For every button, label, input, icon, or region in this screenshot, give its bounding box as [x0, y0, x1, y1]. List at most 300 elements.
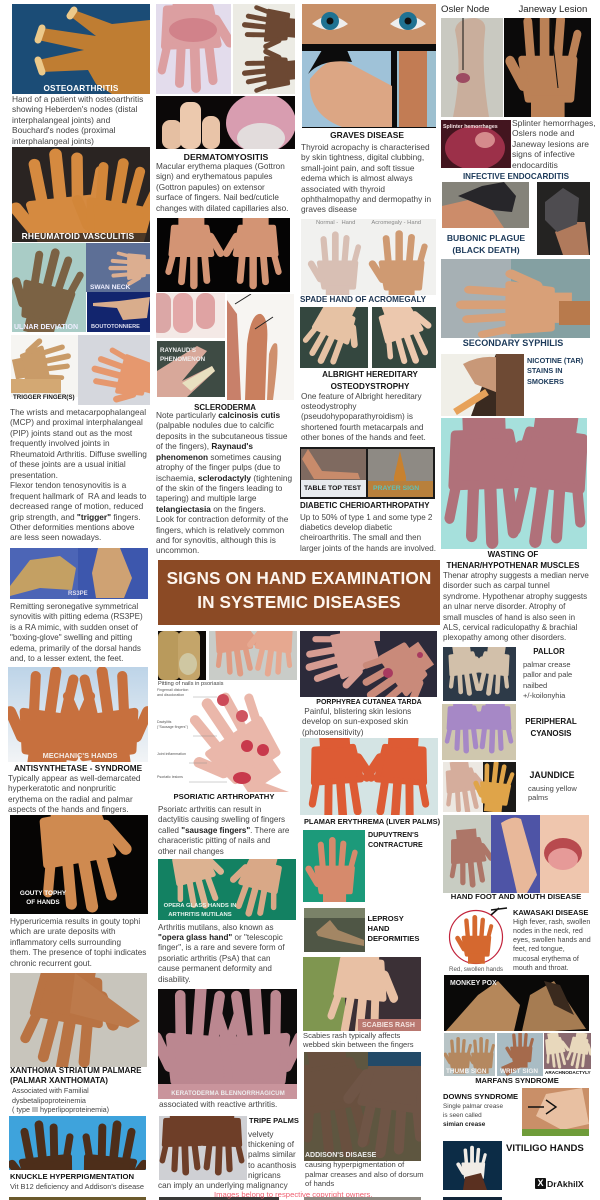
photo: trigger finger left [11, 335, 78, 397]
heading: nicotine stains: SMOKERS [527, 377, 564, 386]
heading: dupuytren's contracture [368, 830, 423, 850]
text: downs description: simian crease [443, 1120, 485, 1128]
text: diabetic description: cheiroarthritis. The small and then [300, 533, 421, 542]
photo: graves hand and shin [302, 44, 436, 128]
photo: addison's disease [304, 1052, 421, 1161]
text: scleroderma description: of the fingers), Raynaud's [156, 441, 253, 451]
photo: bottom strip [9, 1197, 146, 1200]
text: endocarditis description: endocarditis [512, 160, 558, 170]
text: rheumatoid arthritis description: frequent hallmark of RA and leads to [10, 491, 147, 501]
photo: thumb sign [444, 1033, 495, 1076]
photo: arachnodactyly [544, 1033, 591, 1069]
photo: tripe palms [159, 1116, 247, 1180]
text: diabetic description: diabetics develop diabetic [300, 523, 392, 532]
heading: leprosy hand deformities: HAND [368, 924, 389, 933]
text: rheumatoid arthritis description: of these joints are a usual initial [10, 459, 126, 469]
text: reactive arthritis: associated with reactive arthritis. [159, 1100, 277, 1109]
text: rheumatoid arthritis description: (MCP) and proximal interphalangeal [10, 417, 143, 427]
photo: albright right [372, 307, 436, 368]
text: knuckle description: Vit B12 deficiency and Addison's disease [10, 1182, 144, 1191]
text: kawasaki description: High fever, rash, swollen [513, 918, 590, 926]
heading: jaundice: JAUNDICE [530, 770, 574, 780]
text: albright description: One feature of Albright hereditary [301, 392, 422, 400]
photo: bubonic plague fist [537, 182, 590, 255]
heading: bubonic plague: BUBONIC PLAGUE [447, 232, 525, 242]
photo: pallor [443, 647, 516, 701]
text: albright description: osteodystrophy [301, 402, 357, 411]
photo: keratoderma blennorrhagicum [158, 989, 297, 1099]
text: rheumatoid arthritis description: decreased range of motion, reduced [10, 501, 143, 511]
labels: psoriatic hand anatomy: and discoloration [157, 693, 184, 697]
text: gout description: chronic recurrent gout. [10, 959, 92, 968]
heading: dupuytren's contracture: DUPUYTREN'S [368, 831, 419, 839]
photo: nail pitting [158, 631, 206, 680]
heading: wasting of thenar/hypothenar muscles: THENAR/HYPOTHENAR MUSCLES [447, 561, 579, 570]
text: dermatomyositis description: surface of fingers. Nail bed/cuticle [156, 193, 279, 202]
text: dermatomyositis description: (Gottron papules) on extensor [156, 183, 265, 192]
text: wasting description [443, 571, 589, 644]
labels: psoriatic hand anatomy: Fingernail distortion [157, 688, 188, 692]
text: wasting description: plexopathy among other disorders. [443, 633, 566, 642]
heading: albright hereditary osteodystrophy [322, 368, 418, 392]
icon: X logo [535, 1178, 546, 1189]
photo: scleroderma hands [157, 218, 290, 292]
heading: peripheral cyanosis [525, 716, 577, 740]
heading: scleroderma: SCLERODERMA [194, 402, 256, 412]
photo: swan neck [86, 243, 150, 292]
text: scleroderma description: deposits in the subcutaneous tissue [156, 431, 287, 441]
text: antisynthetase description [8, 774, 140, 814]
label: addison's disease: ADDISON'S DISAESE [305, 1152, 376, 1159]
text: addison's description: of hands [305, 1179, 334, 1188]
heading: hand foot and mouth disease: HAND FOOT AND MOUTH DISEASE [451, 892, 581, 901]
heading: palmar erythema: PLAMAR ERYTHREMA (LIVER PALMS) [304, 816, 440, 826]
text: tripe palms description: nigricans [248, 1171, 281, 1180]
text: RS3PE description [10, 602, 143, 663]
labels: psoriatic hand anatomy: Psoriatic lesions [157, 775, 183, 779]
photo: nicotine stains [441, 354, 524, 416]
text: albright description [301, 392, 426, 444]
label: splinter hemorrhages: Splinter hemorrhages [443, 124, 498, 130]
text: rheumatoid arthritis description: presentation. [10, 470, 58, 480]
text: psoriatic arthropathy description [158, 805, 289, 856]
heading: tripe palms: TRIPE PALMS [249, 1116, 299, 1125]
label: prayer sign: PRAYER SIGN [373, 485, 419, 492]
photo: scleroderma fingertips [156, 293, 225, 338]
text: graves description: small-joint pain, and soft tissue [301, 163, 414, 173]
text: arthritis mutilans description: psoriatic arthritis (PsA) that can [158, 954, 270, 963]
text: dermatomyositis description: Macular erythema plaques (Gottron [156, 162, 285, 171]
text: dermatomyositis description: changes with dilated capillaries also. [156, 204, 288, 213]
heading: spade hand of acromegaly: SPADE HAND OF ACROMEGALY [300, 295, 426, 304]
text: diabetic description: Up to 50% of type 1 and some type 2 [300, 512, 432, 522]
text: gout description: inflammatory cells surrounding [10, 938, 121, 947]
text: scleroderma description [156, 410, 292, 555]
labels: psoriatic hand anatomy: ("Sausage fingers") [157, 725, 188, 729]
text: wasting description: an ulnar nerve disorder. Atrophy of [443, 602, 565, 611]
text: graves description: Thyroid acropachy is characterised [301, 142, 430, 152]
icon: kawasaki hand in circle [447, 906, 509, 966]
heading: porphyria cutanea tarda: PORPHYREA CUTANEA TARDA [316, 698, 422, 706]
label: osler node: Osler Node [441, 4, 490, 15]
label: opera glass hands: OPERA GLASS HANDS IN [164, 902, 236, 908]
photo: dupuytren's contracture [303, 830, 365, 902]
text: rheumatoid arthritis description: frequently involved joints in [10, 438, 110, 448]
label: trigger fingers: TRIGGER FINGER(S) [13, 394, 75, 401]
text: gout description: Hyperuricemia results in gouty tophi [10, 917, 140, 926]
photo: boutonniere [87, 292, 150, 332]
heading: albright hereditary osteodystrophy: OSTEODYSTROPHY [331, 382, 409, 390]
label: gouty tophi: OF HANDS [26, 899, 60, 906]
text: kawasaki description [513, 918, 591, 973]
photo: psoriatic hands [209, 631, 297, 680]
text: dermatomyositis description: sign) and erythematous papules [156, 172, 273, 181]
heading: albright hereditary osteodystrophy: ALBRIGHT HEREDITARY [322, 370, 418, 378]
photo: normal and acromegaly hands [301, 219, 436, 295]
text: rheumatoid arthritis description: grip strength, and "trigger" fingers. [10, 512, 141, 522]
photo: opera glass hands [158, 859, 296, 920]
title banner: IN SYSTEMIC DISEASES [197, 592, 401, 612]
label: normal vs acromegaly hand: Normal - Hand Acromegaly - Hand [316, 220, 421, 226]
text: pallor description: +/-koilonyhia [523, 691, 565, 700]
text: kawasaki description: nodes in the neck, red [513, 927, 583, 935]
title banner [158, 560, 440, 625]
photo: scabies rash [303, 957, 421, 1031]
photo: RS3PE [10, 548, 148, 599]
text: albright description: other bones of the hands and feet. [301, 433, 426, 442]
text: antisynthetase description: erythema on the radial and palmar [8, 795, 133, 804]
photo: janeway lesion [504, 18, 591, 117]
heading: pallor: PALLOR [533, 646, 565, 656]
text: RS3PE description: "boxing-glove" swelling and pitting [10, 633, 132, 642]
text: dermatomyositis description [156, 162, 288, 213]
text: rheumatoid arthritis description: Flexor tendon tenosynovitis is a [10, 480, 126, 490]
text: tripe palms description: thickening of [248, 1140, 294, 1149]
photo: bottom strip [159, 1197, 279, 1200]
photo: nail fold changes [156, 96, 295, 149]
text: jaundice description: palms [528, 793, 548, 802]
text: scleroderma description: telangiectasia on the fingers. [156, 504, 266, 514]
text: endocarditis description [512, 118, 596, 170]
heading: nicotine stains: NICOTINE (TAR) [527, 356, 583, 364]
heading: downs syndrome: DOWNS SYNDROME [443, 1092, 518, 1100]
heading: graves disease: GRAVES DISEASE [330, 130, 404, 140]
text: pallor description: pallor and pale [523, 670, 572, 679]
heading: peripheral cyanosis: CYANOSIS [530, 728, 572, 738]
text: porphyria description: Painful, blistering skin lesions [304, 707, 411, 716]
text: downs description [443, 1102, 503, 1128]
text: arthritis mutilans description: finger", is a rare and severe form of [158, 943, 285, 952]
photo: porphyria cutanea tarda [300, 631, 437, 697]
labels: psoriatic hand anatomy: Dactylitis [157, 720, 171, 724]
text: RS3PE description: edema, primarily of the dorsal hands [10, 644, 141, 653]
heading: antisynthetase syndrome: ANTISYNTHETASE - SYNDROME [14, 764, 142, 772]
heading: leprosy hand deformities: DEFORMITIES [368, 934, 419, 943]
text: osteoarthritis description: interphalangeal joints) and [12, 115, 110, 125]
heading: wasting of thenar/hypothenar muscles: WASTING OF [488, 550, 538, 558]
text: arthritis mutilans description: Arthritis mutilans, also known as [158, 922, 274, 932]
text: scleroderma description: Look for contraction deformity of the [156, 514, 288, 524]
text: endocarditis description: Janeway lesions are [512, 138, 589, 148]
heading: vitiligo hands: VITILIGO HANDS [506, 1143, 584, 1154]
text: wasting description: small muscles of hand is also seen in [443, 613, 575, 622]
text: arthritis mutilans description: disability. [158, 975, 191, 984]
icon: X logo: X [537, 1178, 544, 1188]
text: antisynthetase description: hyperkeratotic and nonpruritic [8, 784, 116, 793]
heading: marfans syndrome: MARFANS SYNDROME [475, 1076, 559, 1084]
text: arthritis mutilans description [158, 922, 285, 984]
photo: vitiligo hand [443, 1141, 502, 1190]
text: wasting description: disorder such as carpal tunnel [443, 581, 550, 590]
label: raynaud's phenomenon: PHENOMENON [160, 356, 205, 363]
text: osteoarthritis description [12, 94, 143, 146]
text: scleroderma description: phenomenon sometimes causing [156, 452, 281, 462]
label: opera glass hands: ARTHRITIS MUTILANS [168, 912, 232, 918]
text: graves description: by skin tightness, digital clubbing, [301, 152, 424, 162]
heading: nicotine stains: STAINS IN [527, 366, 563, 375]
text: downs description: Single palmar crease [443, 1102, 503, 1110]
text: addison's description [305, 1160, 424, 1189]
text: osteoarthritis description: Bouchard's nodes (proximal [12, 125, 116, 135]
footer: copyright note: Images belong to respective copyright owners. [214, 1190, 373, 1199]
text: rheumatoid arthritis description: Other deformities mentions above [10, 522, 135, 532]
text: scleroderma description: and for synovitis, although this is [156, 535, 276, 545]
text: diabetic description: larger joints of the hands are involved. [300, 544, 436, 553]
photo: secondary syphilis [441, 259, 590, 338]
photo: dermatomyositis hand dorsum [156, 4, 231, 94]
text: rheumatoid arthritis description [10, 407, 147, 542]
label: gouty tophi: GOUTY TOPHY [20, 890, 66, 897]
text: porphyria description [302, 707, 411, 738]
text: RS3PE description: and, to a lesser extent, the feet. [10, 654, 123, 663]
heading: xanthoma striatum palmare [10, 1066, 142, 1085]
label: boutonniere: BOUTOTONNIERE [91, 324, 140, 330]
text: arthritis mutilans description: cause permanent deformity and [158, 964, 272, 973]
photo: wasting of thenar and hypothenar muscles [441, 418, 587, 549]
photo: osteoarthritis hand [12, 4, 150, 94]
text: pallor description [523, 660, 572, 702]
text: wasting description: syndrome. Hypothenar atrophy suggests [443, 592, 587, 601]
photo: dermatomyositis dark hands [233, 4, 295, 94]
text: porphyria description: (photosensitivity) [302, 728, 363, 737]
photo: jaundice [443, 762, 516, 812]
heading: knuckle hyperpigmentation: KNUCKLE HYPERPIGMENTATION [10, 1172, 134, 1180]
heading: wasting of thenar/hypothenar muscles [447, 548, 579, 571]
text: albright description: shortened fourth metacarpals and [301, 423, 423, 432]
diagram: psoriatic hand illustration [157, 688, 289, 792]
text: author handle: DrAkhilX [547, 1179, 584, 1189]
heading: dupuytren's contracture: CONTRACTURE [368, 841, 423, 849]
heading: xanthoma striatum palmare: XANTHOMA STRIATUM PALMARE [10, 1066, 142, 1074]
photo: knuckle hyperpigmentation [9, 1116, 146, 1170]
text: scleroderma description: Note particularly calcinosis cutis [156, 410, 280, 420]
text: jaundice description [528, 784, 577, 803]
text: graves description [301, 142, 431, 215]
title banner: SIGNS ON HAND EXAMINATION [167, 568, 431, 588]
text: kawasaki description: eyes, swollen hands and [513, 936, 591, 944]
photo: leprosy hand [304, 908, 365, 952]
text: xanthoma description [12, 1086, 109, 1114]
text: osteoarthritis description: interphalangeal joints) [12, 136, 94, 146]
photo: single palmar crease [522, 1088, 589, 1136]
label: ulnar deviation: ULNAR DEVIATION [14, 324, 78, 331]
text: RS3PE description: synovitis with pitting edema (RS3PE) [10, 612, 143, 621]
label: osteoarthritis: OSTEOARTHRITIS [43, 84, 119, 93]
text: psoriatic arthropathy description: dactylitis causing swelling of fingers [158, 815, 285, 824]
text: psoriatic arthropathy description: characeristic pitting of nails and [158, 836, 270, 845]
label: raynaud's phenomenon: RAYNAUD'S [160, 347, 196, 354]
label: scabies rash: SCABIES RASH [362, 1022, 415, 1029]
photo: hand foot and mouth disease [443, 815, 589, 893]
label: janeway lesion: Janeway Lesion [518, 4, 587, 15]
text: rheumatoid arthritis description: Rheumatoid Arthritis. Diffuse swelling [10, 449, 147, 459]
label: RS3PE: RS3PE [68, 591, 88, 597]
text: porphyria description: develop on sun-exposed skin [302, 717, 408, 726]
text: endocarditis description: signs of infective [512, 149, 575, 159]
label: mechanic's hands: MECHANIC'S HANDS [43, 751, 117, 760]
photo: gouty tophi [10, 815, 148, 914]
label: table top test: TABLE TOP TEST [304, 485, 361, 492]
text: pallor description: palmar crease [523, 660, 571, 669]
label: opera glass hands [164, 902, 236, 918]
heading: peripheral cyanosis: PERIPHERAL [525, 716, 577, 726]
text: rheumatoid arthritis description: (PIP) joints stand out as the most [10, 428, 132, 438]
label: thumb sign: THUMB SIGN [446, 1068, 486, 1075]
text: xanthoma description: ( type III hyperlipoproteinemia) [12, 1105, 109, 1114]
heading: bubonic plague: (BLACK DEATH) [452, 244, 520, 254]
text: jaundice description: causing yellow [528, 784, 577, 792]
text: gout description: them. The presence of tophi indicates [10, 948, 146, 957]
photo: rheumatoid vasculitis hands [12, 147, 150, 242]
text: scabies description: webbed skin between the fingers [303, 1040, 414, 1049]
text: downs description: is seen called [443, 1112, 482, 1118]
text: graves description: ophthalmopathy and dermopathy in [301, 194, 431, 204]
text: xanthoma description: dysbetalipoproteinemia [12, 1096, 86, 1105]
text: arthritis mutilans description: "opera glass hand" or "telescopic [158, 933, 283, 942]
heading: secondary syphilis: SECONDARY SYPHILIS [463, 338, 563, 348]
heading: diabetic cheiroarthropathy: DIABETIC CHERIOARTHROPATHY [300, 501, 429, 510]
text: scabies description: Scabies rash typically affects [303, 1030, 400, 1040]
label: rheumatoid vasculitis: RHEUMATOID VASCULITIS [22, 231, 134, 241]
text: psoriatic arthropathy description: called "sausage fingers". There are [158, 826, 289, 835]
text: scabies description [303, 1030, 414, 1050]
text: scleroderma description: ischaemia, sclerodactyly (tightening [156, 473, 292, 483]
text: diabetic description [300, 512, 436, 554]
heading: infective endocarditis: INFECTIVE ENDOCARDITIS [463, 172, 569, 180]
label: swan neck: SWAN NECK [90, 284, 130, 291]
text: tripe palms description: to acanthosis [248, 1161, 296, 1170]
label: monkey pox: MONKEY POX [450, 980, 497, 987]
photo: xanthoma striatum palmare [10, 973, 147, 1067]
text: psoriatic arthropathy description: Psoriatc arthritis can result in [158, 805, 261, 814]
label: wrist sign: WRIST SIGN [500, 1068, 538, 1075]
photo: bottom strip [304, 1197, 421, 1200]
photo: palmar erythema [300, 738, 438, 815]
label: raynaud's phenomenon [160, 347, 205, 363]
photo: raynaud's phenomenon [157, 341, 225, 397]
photo: table top test and prayer sign [300, 447, 435, 499]
heading: psoriatic arthropathy: PSORIATIC ARTHROPATHY [174, 792, 274, 801]
heading: xanthoma striatum palmare: (PALMAR XANTHOMATA) [10, 1076, 108, 1085]
photo: sclerodactyly fingers [227, 294, 294, 400]
text: tripe palms description [248, 1130, 296, 1182]
text: graves description: edema which is almost always [301, 173, 413, 183]
photo: graves eyes [302, 4, 436, 44]
text: scleroderma description: (palpable nodules due to calcific [156, 420, 274, 430]
photo: bubonic plague wide [442, 182, 529, 228]
photo: wrist sign [497, 1033, 543, 1076]
text: RS3PE description: is a RA mimic, with sudden onset of [10, 623, 138, 632]
text: tripe palms description: palms similar [248, 1150, 296, 1159]
heading: nicotine stains [527, 356, 583, 388]
labels: psoriatic hand anatomy [157, 688, 188, 779]
photo: trigger finger right [78, 335, 150, 405]
text: gout description [10, 917, 146, 968]
text: scleroderma description: uncommon. [156, 545, 199, 555]
text: scleroderma description: fingers, which is relatively common [156, 525, 284, 535]
text: psoriatic arthropathy description: other nail changes [158, 847, 224, 856]
text: antisynthetase description: aspects of the hands and fingers. [8, 805, 129, 814]
label: arachnodactyly: ARACHNODACTYLY [545, 1070, 591, 1075]
caption: red swollen hands: Red, swollen hands [449, 966, 503, 973]
text: kawasaki description: mouth and throat. [513, 964, 569, 972]
heading: kawasaki disease: KAWASAKI DISEASE [513, 908, 588, 916]
text: rheumatoid arthritis description: The wrists and metacarpophalangeal [10, 407, 146, 417]
text: endocarditis description: Splinter hemorrhages, [512, 118, 596, 128]
text: osteoarthritis description: showing Heberden's nodes (distal [12, 104, 137, 114]
text: xanthoma description: Associated with Familial [12, 1086, 89, 1095]
text: osteoarthritis description: Hand of a patient with osteoarthritis [12, 94, 143, 104]
photo: splinter hemorrhages [441, 120, 511, 168]
text: endocarditis description: Oslers node and [512, 128, 574, 138]
label: table top test [303, 483, 362, 494]
heading: leprosy hand deformities [368, 914, 419, 945]
photo: osler node [441, 18, 503, 117]
text: graves description: graves disease [301, 204, 357, 214]
text: scleroderma description: tapering) and multiple large [156, 493, 257, 503]
heading: bubonic plague [447, 232, 525, 256]
photo: monkey pox [444, 975, 589, 1031]
text: addison's description: causing hyperpigmentation of [305, 1160, 404, 1169]
text: graves description: associated with thyroid [301, 184, 385, 194]
text: albright description: (pseudohypoparathyroidism) is [301, 412, 413, 421]
photo: ulnar deviation [12, 243, 86, 332]
photo: peripheral cyanosis [442, 704, 516, 760]
text: gout description: which are urate deposits with [10, 927, 116, 936]
text: malignancy note: can imply an underlying malignancy [158, 1181, 288, 1190]
photo: mechanic's hands [8, 667, 148, 762]
labels: psoriatic hand anatomy: Joint inflammation [157, 752, 186, 756]
text: scleroderma description: atrophy of the finger pulps (due to [156, 462, 280, 472]
heading: dermatomyositis: DERMATOMYOSITIS [184, 152, 268, 162]
caption: nail pitting: Pitting of nails in psoriasis [158, 681, 223, 687]
text: antisynthetase description: Typically appear as well-demarcated [8, 774, 140, 783]
text: addison's description: palmar creases and also of dorsum [305, 1170, 424, 1179]
text: RS3PE description: Remitting seronegative symmetrical [10, 602, 138, 611]
text: kawasaki description: mucosal erythema of [513, 955, 579, 963]
text: kawasaki description: feet, red tongue, [513, 945, 565, 953]
photo: albright left [300, 307, 368, 368]
heading: leprosy hand deformities: LEPROSY [368, 914, 404, 922]
label: gouty tophi [20, 890, 66, 906]
text: pallor description: nailbed [523, 681, 547, 690]
text: rheumatoid arthritis description: are less seen nowadays. [10, 532, 101, 542]
text: wasting description: Thenar atrophy suggests a median nerve [443, 571, 589, 580]
label: keratoderma blennorrhagicum: KERATODERMA BLENNORRHAGICUM [171, 1091, 285, 1097]
text: wasting description: ALS, cervical radiculopathy & brachial [443, 623, 577, 632]
text: scleroderma description: of the skin of the fingers leading to [156, 483, 282, 493]
photo: bottom strip [443, 1197, 502, 1200]
